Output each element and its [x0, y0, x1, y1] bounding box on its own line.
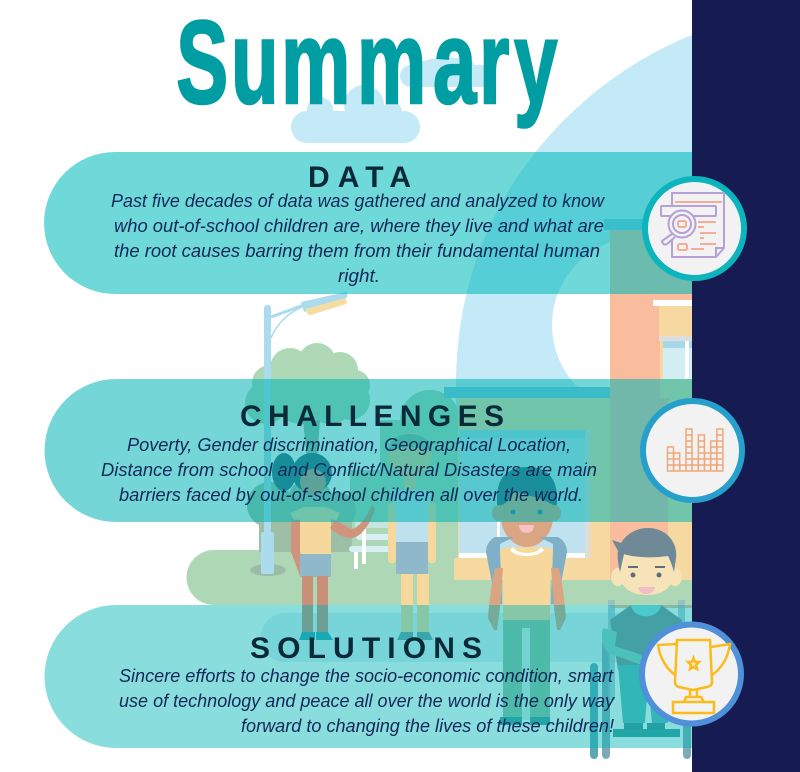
child: boy in light shirt [388, 433, 436, 640]
heading: solutions: SOLUTIONS [250, 632, 482, 665]
icon: document search [645, 179, 744, 278]
cloud behind title [400, 57, 491, 87]
icon: trophy [642, 624, 741, 724]
data band [44, 152, 692, 294]
panel: data [44, 152, 692, 294]
navy side panel [692, 0, 800, 772]
heading: data: DATA [308, 161, 411, 194]
lower trees [247, 390, 460, 552]
heading: challenges: CHALLENGES [240, 400, 504, 433]
challenges description: barriers faced by out-of-school children all over the world. [119, 485, 583, 505]
solutions description: Sincere efforts to change the socio-economic condition, smart [119, 666, 614, 686]
challenges description: Distance from school and Conflict/Natural Disasters are main [101, 460, 597, 480]
school wall and window [444, 387, 692, 605]
child: boy with backpack [486, 467, 567, 725]
large sky-blue arc [456, 35, 692, 600]
data description: the root causes barring them from their fundamental human [114, 241, 600, 261]
data description [111, 191, 605, 286]
data description: right. [338, 266, 380, 286]
child: girl [272, 453, 375, 640]
solutions description: forward to changing the lives of these children! [241, 716, 614, 736]
solutions description: use of technology and peace all over the world is the only way [119, 691, 615, 711]
bench [349, 522, 391, 569]
challenges band [44, 379, 692, 522]
child: boy in wheelchair [590, 528, 691, 759]
school tower [604, 219, 692, 608]
solutions description [119, 666, 615, 736]
upper tree [245, 343, 370, 460]
data description: Past five decades of data was gathered and analyzed to know [111, 191, 605, 211]
white circle inside arc [552, 237, 728, 413]
cloud below title [291, 85, 420, 143]
ground lawn [186, 550, 692, 605]
panel: solutions [44, 605, 692, 748]
data description: who out-of-school children are, where they live and what are [114, 216, 604, 236]
street lamp [250, 292, 348, 576]
background illustration: school scene [186, 35, 728, 759]
icon: bar blocks [643, 401, 742, 500]
solutions band [44, 605, 692, 748]
challenges description [101, 435, 597, 505]
title: Summary [176, 0, 558, 129]
panel: challenges [44, 379, 692, 522]
light foreground path [260, 613, 660, 662]
challenges description: Poverty, Gender discrimination, Geographical Location, [127, 435, 571, 455]
